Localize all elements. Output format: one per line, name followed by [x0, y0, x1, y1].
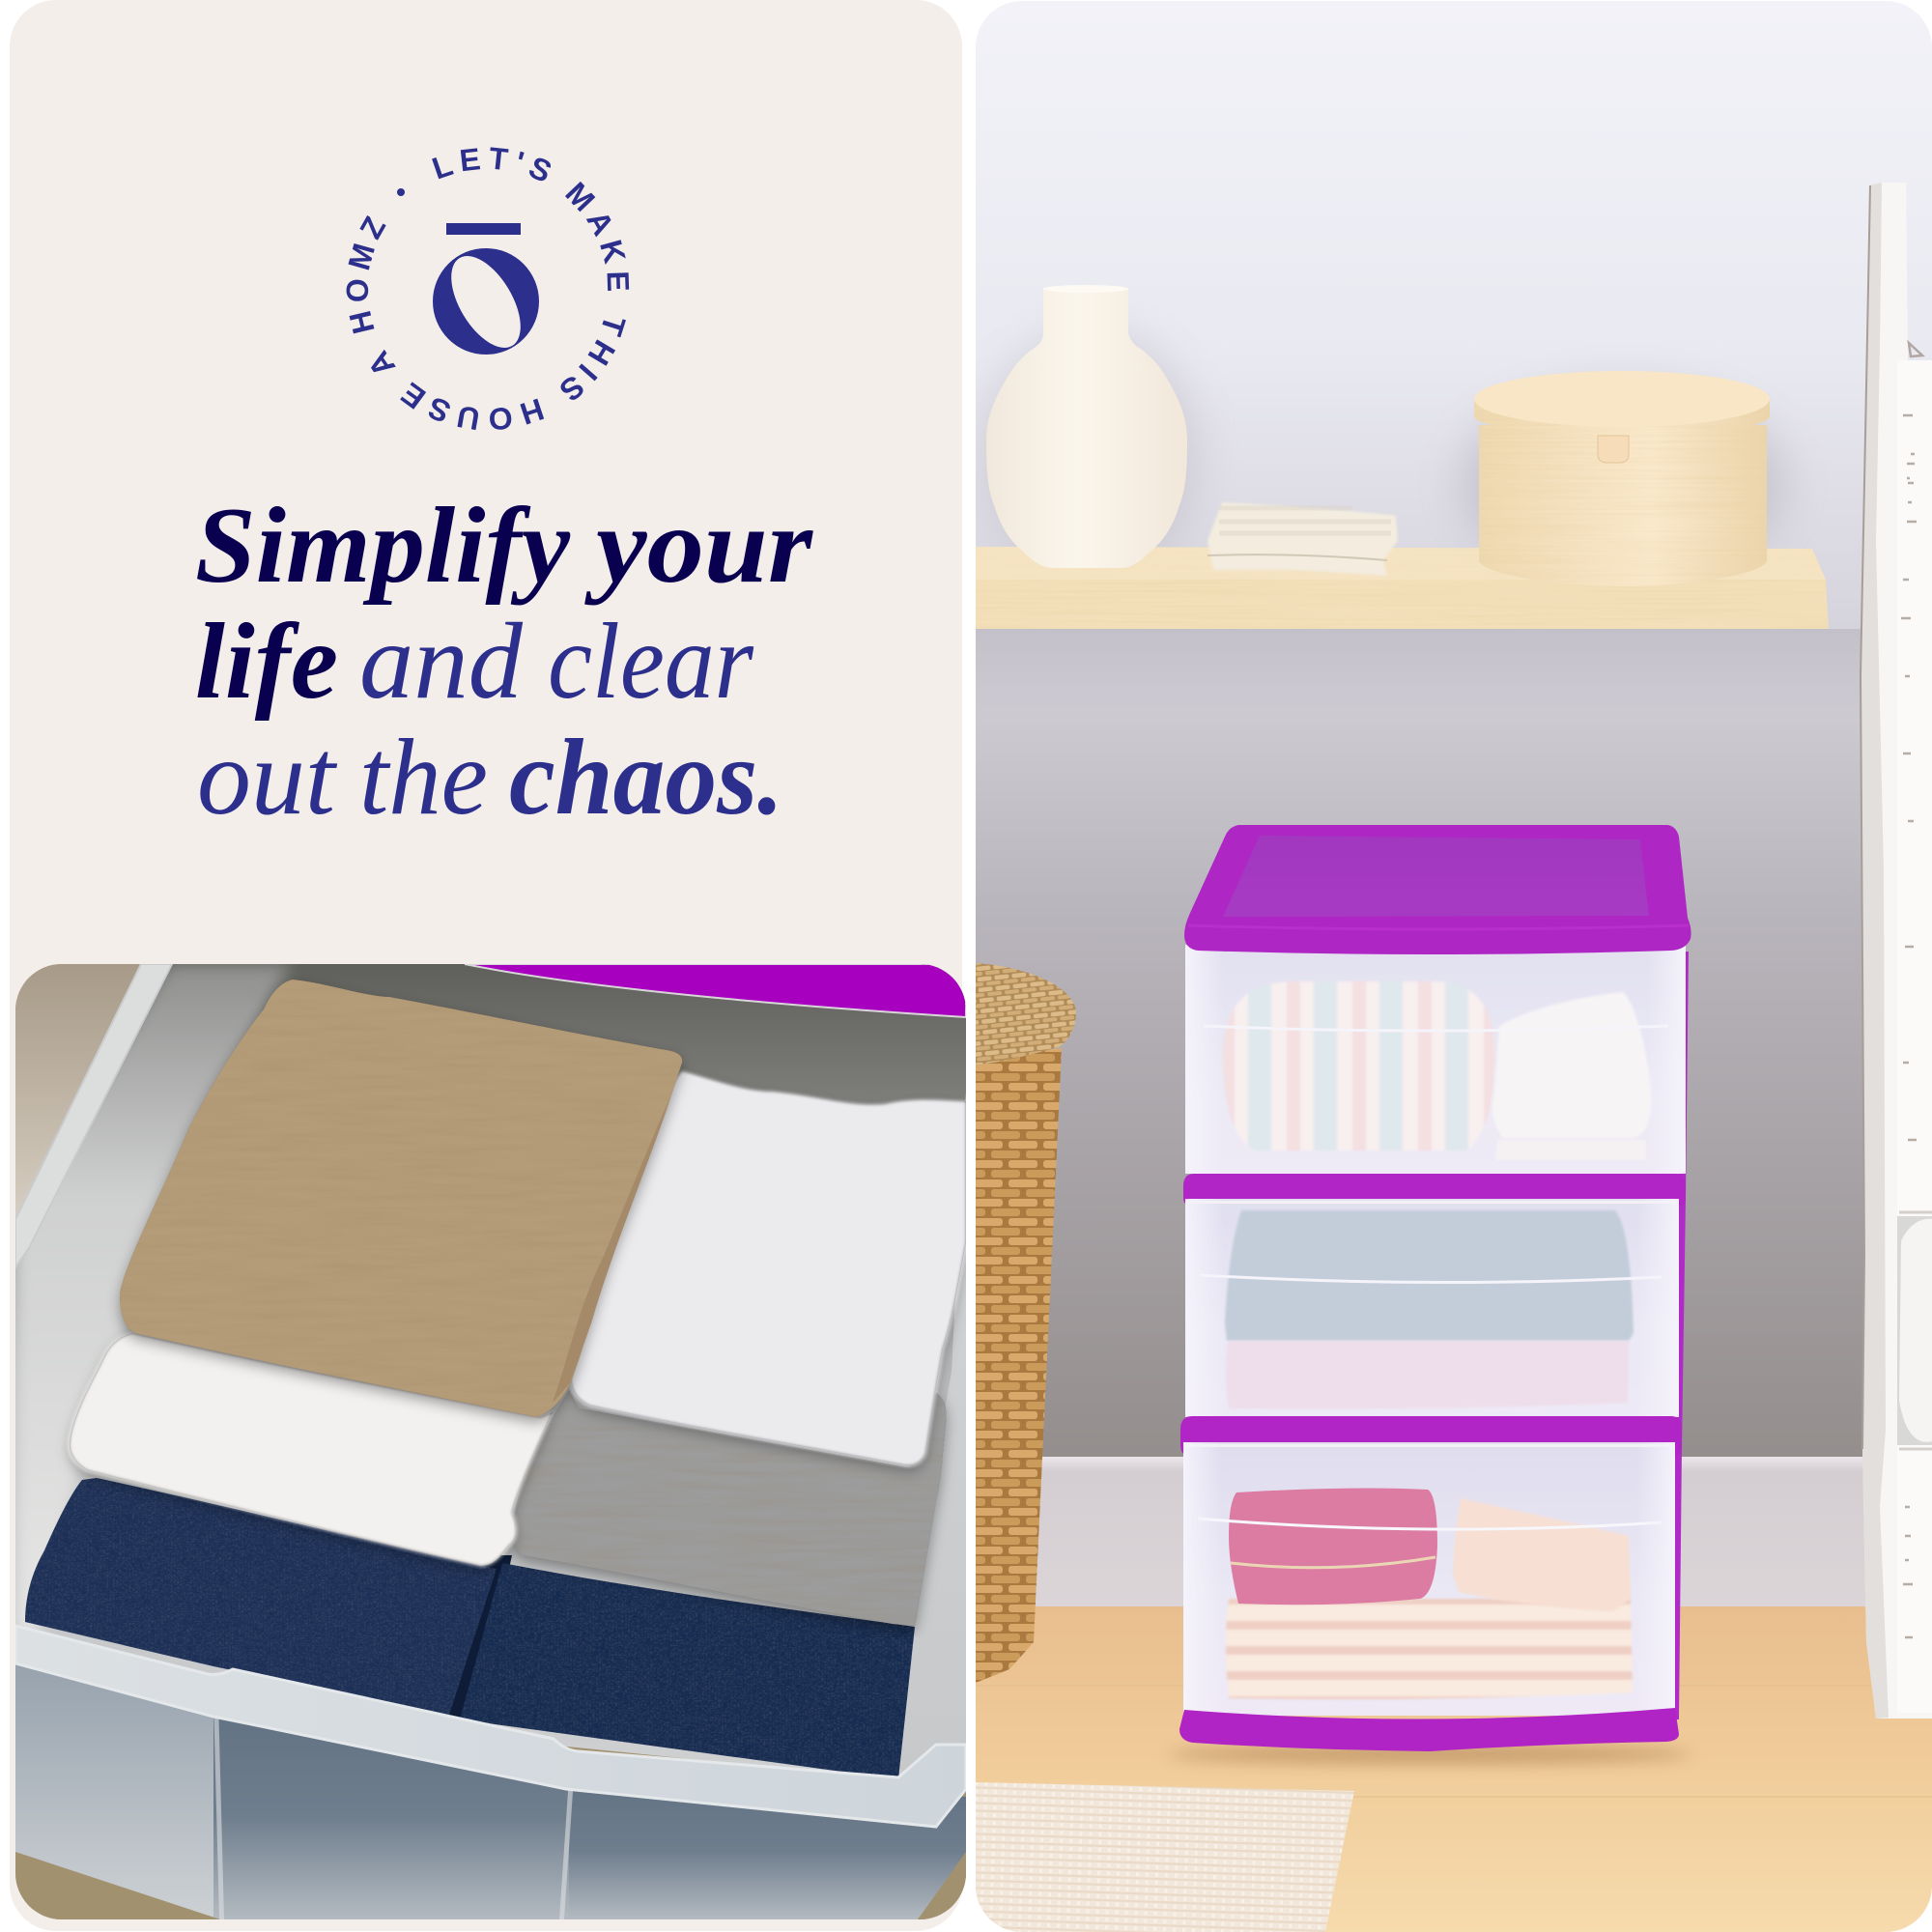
panel: text and logo card [10, 0, 962, 1931]
folded towel [1492, 992, 1652, 1160]
striped towel [1226, 1599, 1633, 1699]
white folded shirt right [571, 1071, 966, 1465]
round wooden box [1474, 371, 1770, 586]
vase [986, 285, 1187, 568]
lid [1184, 825, 1691, 954]
background wall [15, 964, 140, 1217]
navy folded shirt right [460, 1563, 915, 1779]
bar 1 [1183, 1174, 1686, 1207]
plastic drawer tower [1179, 825, 1691, 1751]
base [1179, 1708, 1679, 1751]
handle 2 [1200, 1275, 1662, 1283]
handle 1 [1204, 1026, 1668, 1031]
heading: Simplify [195, 486, 571, 606]
drawer 1 [1185, 945, 1686, 1174]
logo: circular badge: LET'S MAKE THIS HOUSE A HOMZ [346, 147, 630, 431]
blue towel [1225, 1210, 1634, 1341]
pink zip pouch [1229, 1489, 1437, 1605]
grey folded shirt [512, 1390, 947, 1626]
wicker basket [976, 963, 1076, 1683]
heading: the [359, 718, 488, 838]
cosmetics pouch [1223, 981, 1494, 1151]
heading: your [583, 486, 813, 606]
translucent drawer rim [15, 1626, 966, 1827]
right side strip [1671, 952, 1689, 1719]
navy folded shirt left [25, 1478, 497, 1715]
skirting board [1036, 1457, 1866, 1606]
heading: clear [548, 602, 753, 722]
drawer 2 [1185, 1199, 1679, 1417]
heading: life [195, 602, 338, 722]
white folded shirt left [70, 1333, 553, 1566]
drawer interior [15, 964, 966, 1787]
drawer 3 [1183, 1442, 1675, 1716]
heading: chaos. [509, 718, 783, 838]
panel: room scene with drawer tower [976, 0, 1932, 1932]
floor [976, 1606, 1932, 1932]
vase and box shadows [980, 330, 1203, 547]
heading [195, 486, 813, 838]
leaning white ladder shelf [1861, 183, 1932, 1719]
right drawer wall [898, 1092, 966, 1787]
heading: out [197, 718, 338, 838]
folded cloth on shelf [1208, 502, 1398, 576]
drawer left rim [15, 964, 172, 1267]
drawer tower floor shadow [1169, 1745, 1690, 1764]
panel: open drawer photo with folded clothes [15, 964, 966, 1919]
shelf shadow on wall [976, 629, 1861, 676]
drawer left wall [15, 964, 290, 1633]
handle 3 [1198, 1519, 1662, 1529]
tan folded shirt [120, 980, 682, 1417]
rug [976, 1782, 1354, 1932]
shelf [976, 547, 1829, 629]
drawer front face [15, 1642, 966, 1919]
gap between navy shirts [440, 1555, 512, 1729]
bar 2 [1180, 1416, 1682, 1457]
floor corners [15, 1852, 220, 1919]
peach pouch [1453, 1498, 1631, 1611]
pink towel [1226, 1341, 1629, 1408]
purple drawer lid edge [465, 964, 966, 1017]
heading: and [359, 602, 524, 722]
